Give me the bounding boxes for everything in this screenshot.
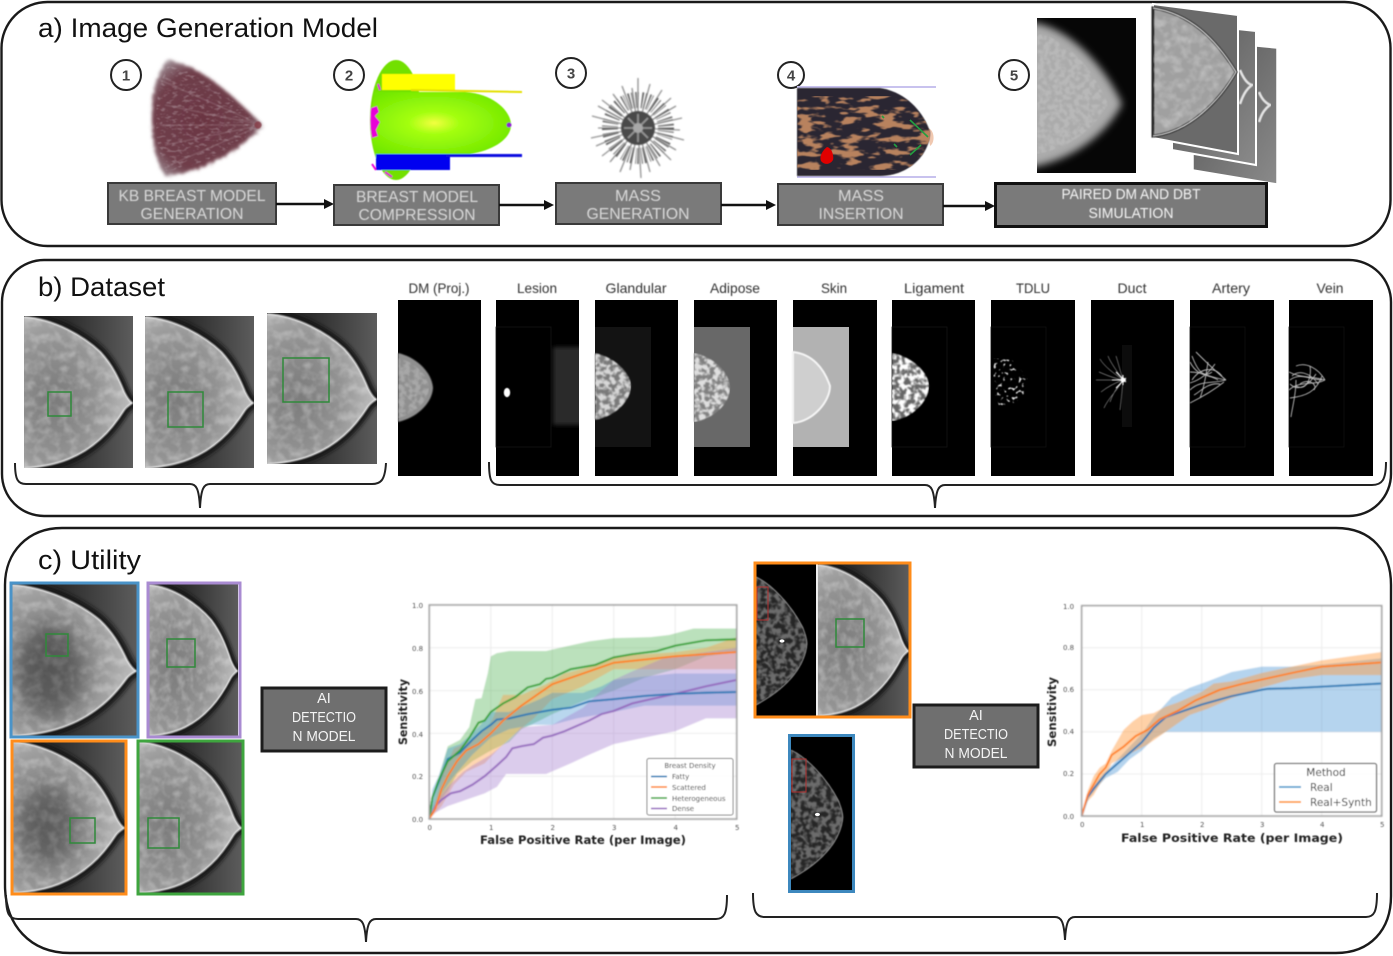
axis tick labels: 0.4 — [1063, 728, 1075, 736]
column: TDLU: TDLU — [1016, 280, 1050, 296]
box: AI detection model (right) — [914, 705, 1038, 767]
axis tick labels: 1 — [1140, 821, 1144, 829]
y axis label: Sensitivity — [1045, 676, 1059, 747]
process box: mass generation — [556, 183, 721, 224]
axis tick labels: 1.0 — [412, 602, 423, 610]
icon: compressed breast 3D model — [370, 60, 522, 180]
heading: a) image generation model: a) Image Generation Model — [38, 13, 378, 43]
image: stack of DBT slices — [1153, 4, 1277, 184]
axis tick labels — [1063, 603, 1384, 829]
step 2 number: 2 — [345, 68, 353, 84]
legend: breast density: Fatty — [672, 773, 689, 781]
box: AI detection model (right): AI — [969, 708, 983, 724]
box: AI detection model (left): N MODEL — [292, 729, 356, 745]
arrow: step 1 to 2 — [276, 199, 334, 209]
process box: mass insertion: MASS — [838, 188, 884, 205]
mammogram 3 with large lesion box — [267, 313, 377, 464]
column: adipose — [694, 280, 777, 476]
column: skin — [793, 280, 877, 476]
bracket under component maps — [489, 462, 1386, 508]
process box: paired DM and DBT simulation — [996, 184, 1266, 226]
step 4 number — [778, 62, 804, 88]
axis tick labels: 0.2 — [1063, 770, 1074, 778]
column: glandular: Glandular — [606, 280, 667, 296]
plot area with bands and curves — [429, 605, 737, 819]
panel: c) utility — [5, 528, 1391, 953]
process box: KB breast model generation — [108, 183, 276, 224]
process box: KB breast model generation: KB BREAST MODEL — [118, 188, 266, 205]
legend: breast density: Scattered — [672, 784, 706, 792]
legend: method — [1274, 764, 1376, 812]
axis tick labels: 3 — [612, 824, 616, 832]
axis tick labels: 0.0 — [412, 816, 423, 824]
process box: breast model compression: COMPRESSION — [358, 207, 476, 224]
step 4 number: 4 — [787, 68, 796, 84]
column: skin: Skin — [821, 280, 847, 296]
axis tick labels: 0.6 — [412, 688, 424, 696]
process box: mass insertion: INSERTION — [818, 206, 904, 223]
step 1 number: 1 — [122, 68, 130, 84]
training image: scattered, orange frame — [12, 741, 126, 894]
axis tick labels: 0 — [1080, 821, 1084, 829]
process box: paired DM and DBT simulation: SIMULATION — [1088, 206, 1174, 222]
x axis label: False Positive Rate (per Image) — [480, 833, 686, 847]
axis tick labels: 0 — [428, 824, 432, 832]
axis tick labels: 1.0 — [1063, 603, 1074, 611]
legend: breast density: Heterogeneous — [672, 795, 726, 803]
blue frame: real DBT slice — [790, 736, 854, 892]
axis tick labels: 5 — [735, 824, 739, 832]
column: lesion: Lesion — [517, 280, 557, 296]
axis tick labels: 0.4 — [412, 731, 424, 739]
column: ligament — [892, 280, 975, 476]
box: AI detection model (right): N MODEL — [944, 746, 1008, 762]
legend: breast density — [647, 758, 733, 815]
column: duct — [1091, 280, 1174, 476]
axis tick labels: 0.0 — [1063, 813, 1074, 821]
chart: sensitivity by breast density — [396, 602, 739, 847]
legend: breast density: Dense — [672, 805, 694, 813]
column: duct: Duct — [1118, 280, 1147, 296]
axis tick labels: 1 — [489, 824, 493, 832]
axis tick labels: 0.2 — [412, 773, 423, 781]
axis tick labels: 0.8 — [412, 645, 423, 653]
axis tick labels — [412, 602, 739, 832]
heading: c) utility: c) Utility — [38, 545, 142, 575]
bracket under mammograms — [15, 463, 386, 508]
icon: spiculated mass — [591, 78, 684, 178]
process box: mass generation: MASS — [615, 188, 661, 205]
mammogram 2 with medium lesion box — [145, 316, 254, 468]
plot area with bands and curves — [1082, 606, 1382, 816]
step 5 number — [999, 60, 1029, 90]
panel: b) dataset — [2, 260, 1391, 516]
arrow: step 3 to 4 — [721, 200, 776, 210]
axis tick labels: 2 — [550, 824, 555, 832]
bracket under paired images and method chart — [753, 893, 1377, 940]
training image: fatty, blue frame — [11, 583, 138, 737]
column: artery — [1190, 280, 1274, 476]
column: lesion — [496, 280, 583, 476]
training image: heterogeneous, green frame — [138, 741, 243, 894]
legend: method: Real — [1310, 782, 1333, 794]
axis tick labels: 0.6 — [1063, 686, 1075, 694]
process box: mass generation: GENERATION — [586, 206, 690, 223]
column: ligament: Ligament — [904, 280, 964, 296]
axis tick labels: 3 — [1260, 821, 1264, 829]
column: vein: Vein — [1316, 280, 1344, 296]
icon: breast with inserted mass — [797, 87, 936, 177]
column: artery: Artery — [1212, 280, 1250, 296]
process box: KB breast model generation: GENERATION — [140, 206, 244, 223]
axis tick labels: 0.8 — [1063, 644, 1074, 652]
arrow: step 4 to 5 — [943, 201, 995, 211]
step 3 number — [556, 58, 586, 88]
image: simulated DM mammogram — [1028, 18, 1136, 173]
x axis label: False Positive Rate (per Image) — [1121, 831, 1343, 845]
box: AI detection model (right): DETECTIO — [944, 727, 1008, 743]
orange frame: paired DBT slice and DM image — [755, 563, 910, 717]
icon: fibrous breast model — [152, 60, 263, 176]
box: AI detection model (left): DETECTIO — [292, 710, 356, 726]
step 5 number: 5 — [1010, 68, 1018, 84]
legend: method: Real+Synth — [1310, 797, 1372, 809]
process box: breast model compression: BREAST MODEL — [356, 189, 478, 206]
training image: dense, purple frame — [148, 583, 240, 737]
legend: method: Method — [1306, 767, 1346, 779]
axis tick labels: 4 — [674, 824, 678, 832]
axis tick labels: 2 — [1200, 821, 1204, 829]
column: TDLU — [991, 280, 1075, 476]
column: DM projection — [398, 280, 481, 476]
legend: breast density: Breast Density — [664, 762, 716, 770]
column: adipose: Adipose — [710, 280, 760, 296]
bracket under training set and AUC chart — [6, 895, 727, 942]
column: glandular — [595, 280, 678, 476]
step 1 number — [111, 60, 141, 90]
panel: a) image generation model — [2, 2, 1390, 246]
process box: mass insertion — [778, 184, 943, 225]
arrow: step 2 to 3 — [499, 200, 554, 210]
process box: paired DM and DBT simulation: PAIRED DM AND DBT — [1062, 187, 1201, 203]
y axis label: Sensitivity — [396, 679, 410, 745]
box: AI detection model (left) — [262, 688, 386, 751]
axis tick labels: 5 — [1380, 821, 1384, 829]
box: AI detection model (left): AI — [317, 691, 331, 707]
step 2 number — [334, 60, 364, 90]
column: vein — [1289, 280, 1373, 476]
step 3 number: 3 — [567, 66, 575, 82]
heading: b) dataset: b) Dataset — [38, 272, 166, 302]
axis tick labels: 4 — [1320, 821, 1325, 829]
column: DM projection: DM (Proj.) — [408, 280, 470, 296]
mammogram 1 with small lesion box — [24, 316, 133, 468]
chart: sensitivity by method — [1045, 603, 1384, 845]
process box: breast model compression — [334, 185, 499, 225]
